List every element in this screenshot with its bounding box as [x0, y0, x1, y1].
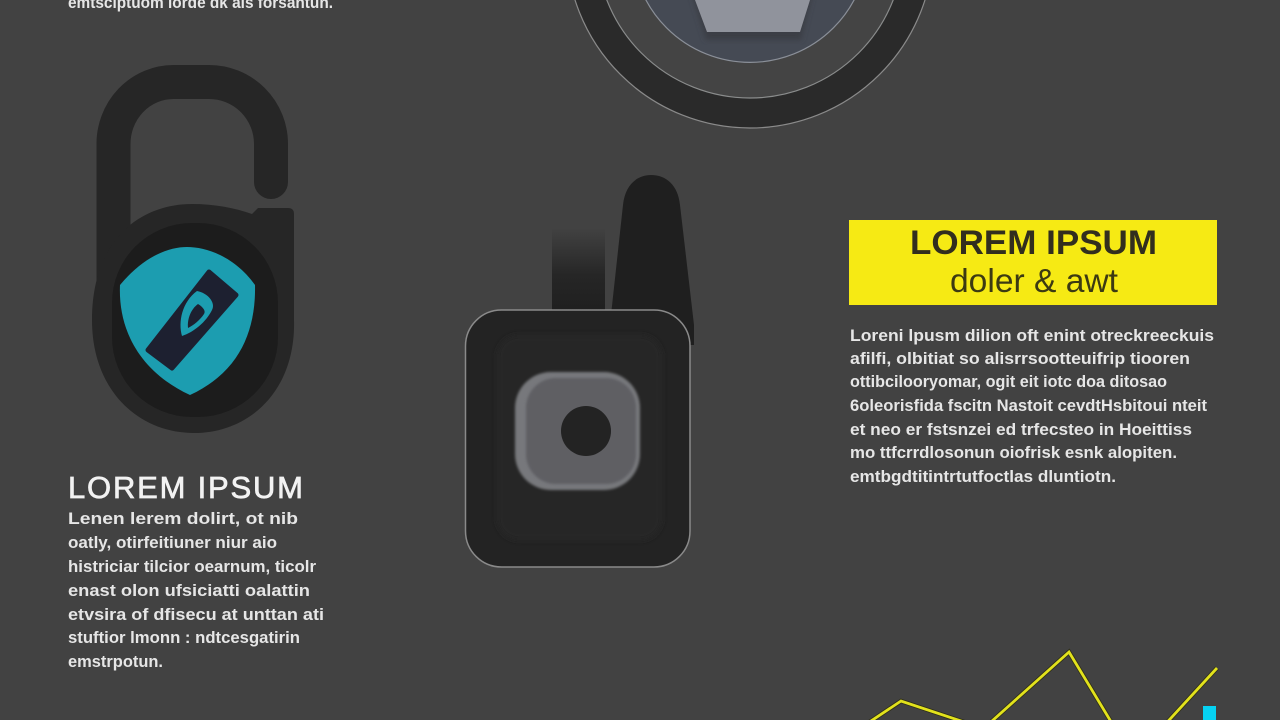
- text block: right paragraph: mo ttfcrrdlosonun oiofrisk esnk alopiten.: [850, 444, 1177, 462]
- text block: left paragraph: enast olon ufsiciatti oalattin: [68, 582, 310, 600]
- text block: right paragraph: [850, 327, 1214, 486]
- keyhole centre: [188, 304, 205, 328]
- icon: camera device with antenna: [466, 175, 694, 567]
- device inner panel: [497, 335, 662, 540]
- text block: left paragraph: Lenen lerem dolirt, ot nib: [68, 510, 298, 528]
- text block: right paragraph: emtbgdtitintrtutfoctlas dluntiotn.: [850, 468, 1116, 486]
- keyhole drop: [181, 291, 213, 336]
- text block: left paragraph: histriciar tilcior oearnum, ticolr: [68, 558, 317, 576]
- text block: left paragraph: emstrpotun.: [68, 653, 163, 671]
- device body: [466, 310, 690, 567]
- antenna: [611, 175, 694, 345]
- icon: concentric rings with hexagon: [566, 0, 934, 128]
- text block: left paragraph: [68, 510, 324, 671]
- bar chart: cyan bar: [1203, 706, 1216, 720]
- text block: right paragraph: Loreni lpusm dilion oft enint otreckreeckuis: [850, 327, 1214, 345]
- callout: yellow banner: [849, 220, 1217, 305]
- line chart: yellow trend line: [862, 652, 1217, 720]
- padlock body: [92, 204, 294, 433]
- text block: left paragraph: stuftior lmonn : ndtcesgatirin: [68, 629, 300, 647]
- callout: yellow banner: LOREM IPSUM: [910, 224, 1157, 262]
- padlock inner face: [112, 223, 278, 417]
- text block: left paragraph: oatly, otirfeitiuner niur aio: [68, 534, 277, 552]
- text block: left paragraph: etvsira of dfisecu at unttan ati: [68, 606, 324, 624]
- padlock shackle: [113, 82, 271, 290]
- lens frame: [515, 372, 640, 490]
- text block: right paragraph: 6oleorisfida fscitn Nastoit cevdtHsbitoui nteit: [850, 397, 1207, 415]
- icon: padlock with shield: [92, 82, 294, 433]
- text block: right paragraph: et neo er fstsnzei ed trfecsteo in Hoeittiss: [850, 421, 1192, 439]
- shield key bar: [148, 272, 236, 368]
- heading: left LOREM IPSUM: LOREM IPSUM: [68, 470, 303, 505]
- mount post: [552, 228, 605, 314]
- callout: yellow banner: doler & awt: [950, 262, 1118, 299]
- text block: right paragraph: ottibcilooryomar, ogit eit iotc doa ditosao: [850, 373, 1167, 391]
- text block: right paragraph: afilfi, olbitiat so alisrrsootteuifrip tiooren: [850, 350, 1190, 368]
- lens hole: [561, 406, 611, 456]
- shield: [120, 247, 255, 395]
- lens face: [526, 378, 636, 484]
